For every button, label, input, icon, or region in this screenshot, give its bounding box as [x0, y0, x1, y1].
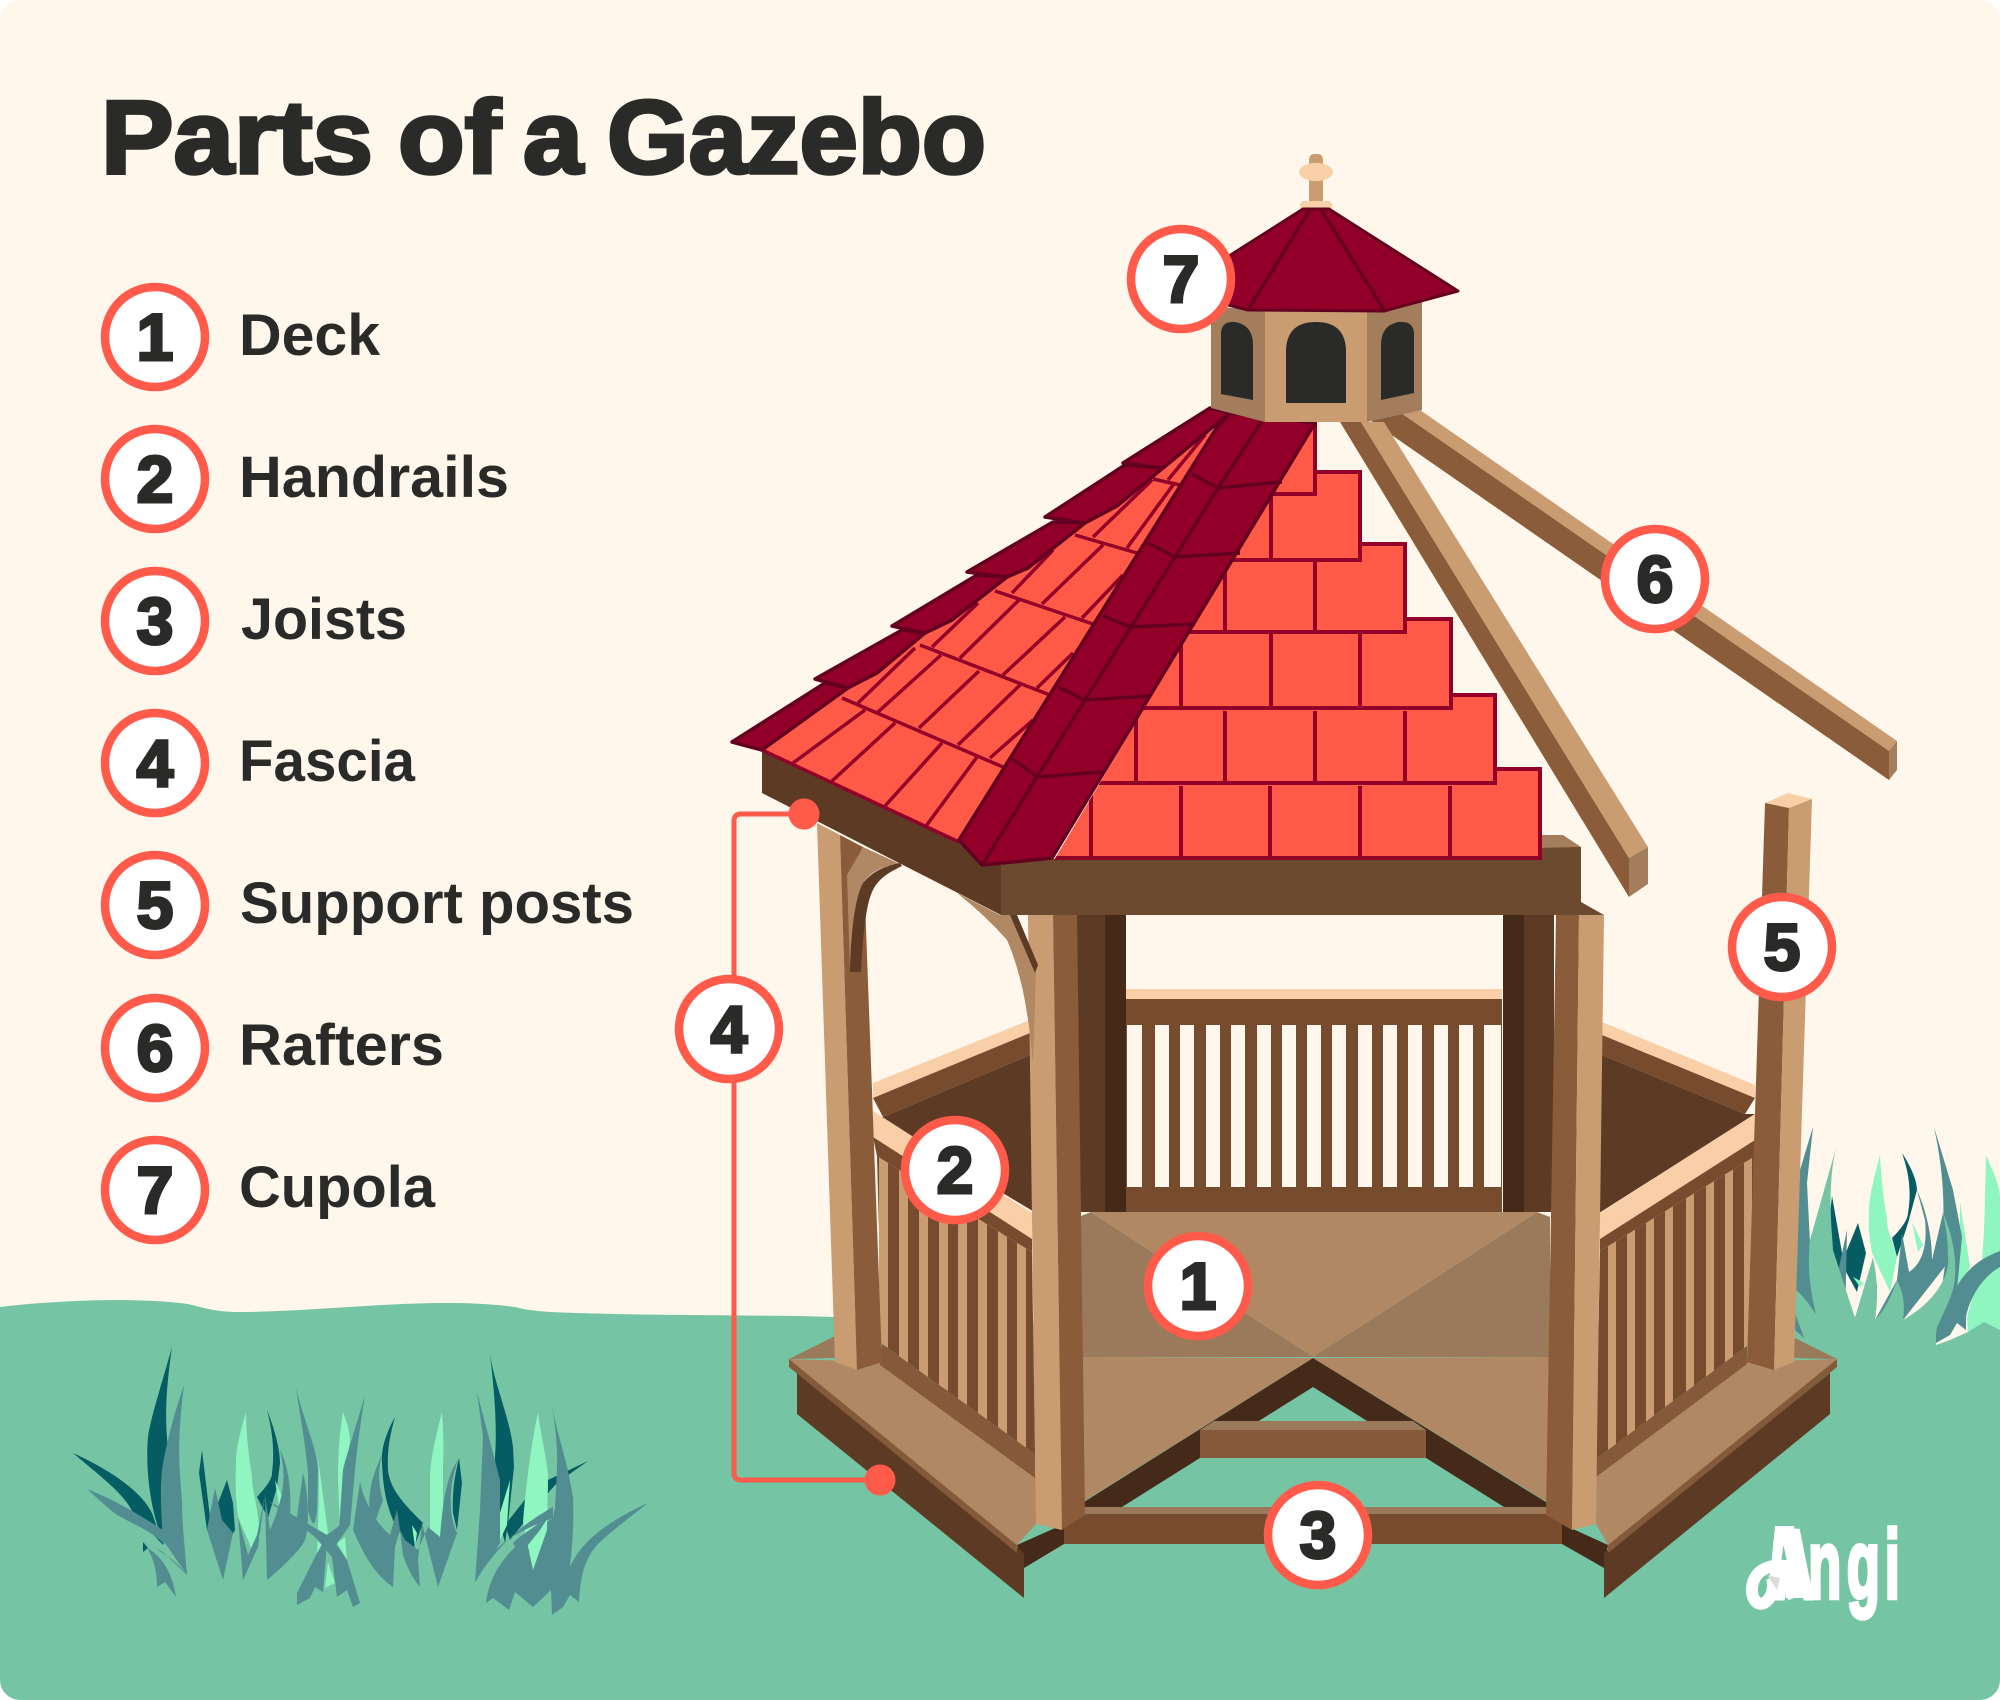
joists	[1017, 1358, 1608, 1568]
roof: ridge shingles	[732, 408, 1230, 750]
title: a	[523, 80, 584, 196]
brackets	[847, 847, 1038, 1063]
gazebo illustration	[732, 154, 1897, 1598]
roof: side shingles	[762, 427, 1217, 842]
legend item 4	[105, 713, 416, 813]
legend item 6	[105, 998, 444, 1098]
legend item 5: 5	[137, 868, 173, 942]
legend item 2: 2	[137, 442, 173, 516]
legend item 7	[105, 1140, 436, 1240]
callout 7	[1131, 229, 1231, 329]
title: Parts	[101, 80, 373, 196]
callout 4	[679, 979, 779, 1079]
callout 6	[1605, 529, 1705, 629]
deck sides	[789, 1336, 1837, 1598]
cupola	[1174, 154, 1458, 422]
callout 7: 7	[1163, 242, 1199, 316]
back walls and rail	[873, 989, 1755, 1215]
callout 2	[905, 1120, 1005, 1220]
legend item 4: 4	[137, 726, 174, 800]
legend	[105, 287, 634, 1240]
callout 1	[1148, 1236, 1248, 1336]
legend item 7: Cupola	[239, 1155, 436, 1220]
callout 4: 4	[711, 992, 748, 1066]
grass: right clump	[1794, 1127, 2000, 1360]
legend item 5: Support posts	[240, 871, 634, 936]
legend item 3: 3	[137, 584, 173, 658]
roof: front shingles	[1054, 422, 1542, 860]
callout 2: 2	[937, 1133, 973, 1207]
callout 5: 5	[1764, 910, 1800, 984]
logo: Angi: Angi	[1774, 1510, 1900, 1619]
legend item 4: Fascia	[239, 729, 416, 794]
title: of	[398, 80, 501, 196]
legend item 2: Handrails	[239, 445, 509, 510]
legend item 1	[105, 287, 381, 387]
grass: left clump	[73, 1347, 648, 1615]
legend item 3: Joists	[241, 587, 407, 652]
callout 3	[1268, 1485, 1368, 1585]
deck floor	[1078, 1212, 1552, 1505]
legend item 3	[105, 571, 407, 671]
handrail: left	[873, 1111, 1035, 1478]
fascia	[762, 750, 1604, 915]
ground	[0, 1300, 2000, 1700]
rafters	[1340, 410, 1897, 897]
legend item 7: 7	[137, 1153, 173, 1227]
legend item 5	[105, 855, 634, 955]
title	[101, 80, 986, 196]
callout 6: 6	[1637, 542, 1673, 616]
legend item 2	[105, 429, 509, 529]
handrail: right	[1596, 1114, 1755, 1477]
fascia leader line	[734, 798, 896, 1496]
roof: hip band	[959, 413, 1315, 865]
callout 1: 1	[1180, 1249, 1216, 1323]
legend item 1: 1	[137, 300, 173, 374]
legend item 6: 6	[137, 1011, 173, 1085]
legend item 1: Deck	[239, 303, 381, 368]
title: Gazebo	[607, 80, 986, 196]
legend item 6: Rafters	[239, 1013, 444, 1078]
callout 5	[1732, 897, 1832, 997]
callout 3: 3	[1300, 1498, 1336, 1572]
support posts	[817, 793, 1812, 1530]
